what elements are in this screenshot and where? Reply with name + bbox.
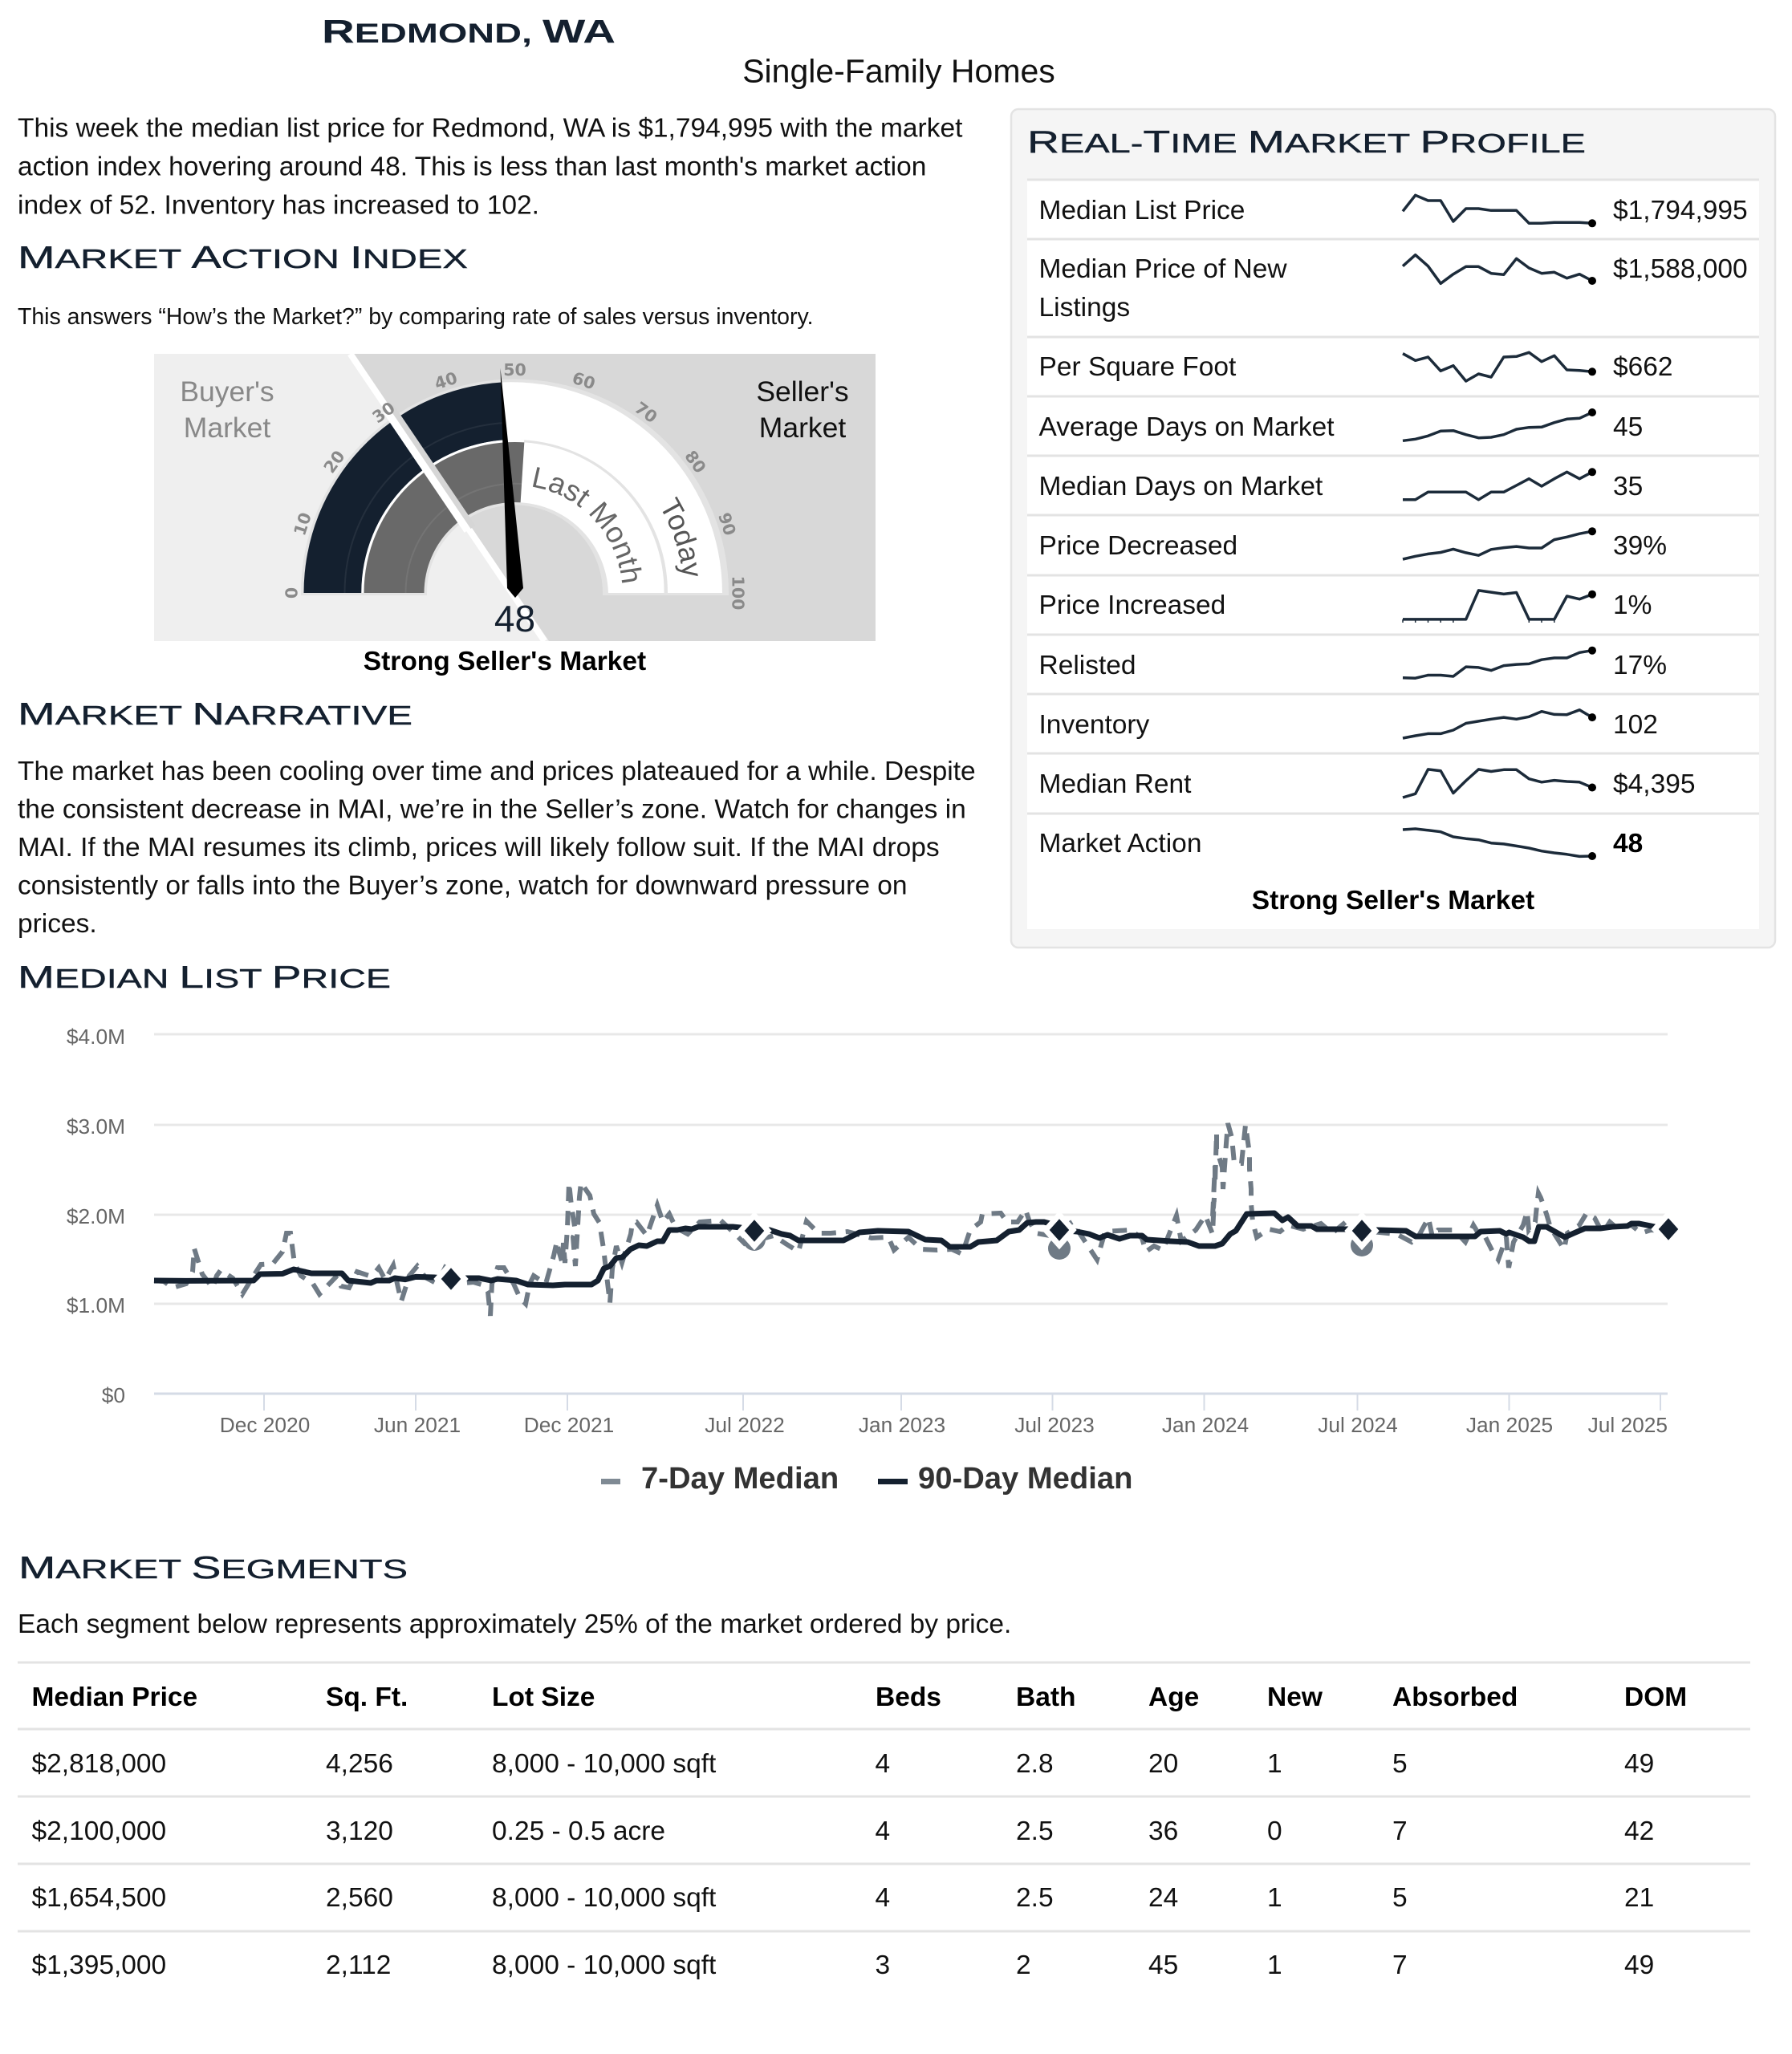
row: median days on market: Median Days on Market [1038,472,1323,501]
y axis labels: $0 [102,1383,125,1407]
last month value arc [364,442,524,593]
row: price decreased [1038,527,1667,561]
y axis labels: $4.0M [67,1025,125,1049]
segment row 1: 20 [1148,1749,1178,1779]
table header [32,1683,1687,1712]
table header: DOM [1624,1683,1687,1712]
row: price increased: 1% [1613,591,1652,620]
segment row 1: 4 [875,1749,890,1779]
segment row 2: 3,120 [326,1817,393,1846]
row: median list price: $1,794,995 [1613,196,1748,225]
y axis labels: $2.0M [67,1204,125,1228]
segment row 4: 2,112 [326,1950,391,1980]
row: inventory: Inventory [1038,710,1150,740]
segment row 4: 7 [1392,1950,1408,1980]
x axis labels: Dec 2020 [220,1413,310,1437]
row: median price of new listings: Median Price of New [1038,254,1287,284]
segment row 1: 2.8 [1016,1749,1054,1779]
gauge background: buyer zone [154,354,876,641]
row: median rent: Median Rent [1038,769,1192,799]
y axis labels: $3.0M [67,1114,125,1139]
segment row 1: 4,256 [326,1749,393,1779]
row: average days on market: 45 [1613,412,1643,442]
segment row 3: 1 [1267,1883,1282,1913]
gauge scale labels: 100 [729,576,748,610]
row: median list price: Median List Price [1038,196,1245,225]
row: average days on market [1038,408,1643,442]
last month band empty part [521,442,664,593]
gauge divider stripe [388,409,469,530]
segment row 3: 21 [1624,1883,1654,1913]
x axis labels: Jan 2023 [859,1413,945,1437]
heading: market segments: M ARKET S EGMENTS [18,1551,408,1585]
x axis labels: Jun 2021 [374,1413,461,1437]
row: relisted: 17% [1613,651,1667,680]
segment row 1 [32,1749,1654,1779]
table header: New [1267,1683,1323,1712]
x axis labels: Jul 2023 [1014,1413,1095,1437]
line chart: median list price [67,1025,1682,1496]
segment row 3: $1,654,500 [32,1883,166,1913]
gauge scale labels: 10 [290,510,315,538]
intro text block: index of 52. Inventory has increased to 102. [18,191,539,220]
7-day median series [154,1123,1668,1316]
gauge caption: Strong Seller's Market [364,647,646,676]
today value arc [303,382,506,593]
gauge scale labels: 40 [432,368,460,393]
row: relisted [1038,647,1667,680]
row: inventory: 102 [1613,710,1658,740]
market narrative text block: prices. [18,909,97,939]
segment row 1: 1 [1267,1749,1282,1779]
segment row 2: 2.5 [1016,1817,1054,1846]
label: today: Today [663,496,698,576]
gauge scale labels [282,360,748,610]
row: median rent [1038,769,1695,799]
table header: Sq. Ft. [326,1683,408,1712]
segment row 4: 49 [1624,1950,1654,1980]
row: market action: 48 [1613,829,1643,859]
intro text block: action index hovering around 48. This is less than last month's market action [18,152,926,181]
table header: Beds [876,1683,941,1712]
profile summary: Strong Seller's Market [1252,886,1534,915]
row: average days on market: Average Days on Market [1038,412,1335,442]
row: price decreased: 39% [1613,531,1667,561]
gauge value: 48 [494,598,535,639]
gauge ring outline [301,379,729,595]
heading: market narrative: M ARKET N ARRATIVE [18,697,412,732]
zone divider [350,354,544,641]
segment row 2: 0 [1267,1817,1282,1846]
gauge scale labels: 90 [714,510,740,538]
segment row 2: 4 [875,1817,890,1846]
table header: Age [1148,1683,1199,1712]
panel: real-time market profile [1011,109,1775,948]
segment row 3: 8,000 - 10,000 sqft [492,1883,717,1913]
gauge scale labels: 50 [503,360,526,380]
x axis labels: Jul 2024 [1318,1413,1398,1437]
title: R EDMOND, WA [322,13,616,50]
table header: Absorbed [1392,1683,1518,1712]
row: price increased: Price Increased [1038,591,1225,620]
segment row 4: 1 [1267,1950,1282,1980]
row: per square foot: $662 [1613,352,1673,382]
x axis labels: Jan 2025 [1466,1413,1553,1437]
x axis labels: Jul 2022 [705,1413,785,1437]
row: median days on market [1038,468,1643,501]
gauge scale labels: 70 [631,398,660,427]
market narrative text block: MAI. If the MAI resumes its climb, prices will likely follow suit. If the MAI drops [18,833,940,863]
heading: median list price: M EDIAN L IST P RICE [18,960,391,995]
gauge scale labels: 30 [369,398,399,427]
seller's market label: Seller's [756,375,849,408]
table header: Lot Size [492,1683,595,1712]
segment row 2: 42 [1624,1817,1654,1846]
market action index description: This answers “How’s the Market?” by comparing rate of sales versus inventory. [18,304,813,330]
7-day markers [743,1220,1679,1260]
heading: market action index: M ARKET A CTION INDEX [18,241,468,275]
segment row 2: 7 [1392,1817,1408,1846]
segment row 4: 2 [1016,1950,1031,1980]
x axis labels [220,1413,1668,1437]
label: last month: Last Month [533,467,642,583]
gauge: market action index [154,354,876,641]
segment row 2: 0.25 - 0.5 acre [492,1817,665,1846]
segment row 2 [32,1817,1654,1846]
row: per square foot [1038,352,1673,382]
market narrative text block: The market has been cooling over time and prices plateaued for a while. Despite [18,757,976,786]
today band empty part [502,382,722,593]
chart legend: 7-Day Median [641,1461,839,1496]
row: median price of new listings: Listings [1038,293,1130,323]
profile table [1027,180,1759,929]
row: relisted: Relisted [1038,651,1136,680]
y axis labels: $1.0M [67,1293,125,1317]
segment row 1: 8,000 - 10,000 sqft [492,1749,717,1779]
segment row 3 [32,1883,1654,1913]
grid lines [154,1034,1668,1304]
row: price decreased: Price Decreased [1038,531,1237,561]
gauge scale labels: 20 [320,447,349,477]
segment row 1: 49 [1624,1749,1654,1779]
row: per square foot: Per Square Foot [1038,352,1237,382]
intro text block: This week the median list price for Redmond, WA is $1,794,995 with the market [18,114,963,143]
row: median rent: $4,395 [1613,769,1695,799]
gauge scale labels: 80 [681,447,709,477]
row: inventory [1038,710,1658,740]
seller's market label: Market [759,412,846,444]
row: market action: Market Action [1038,829,1201,859]
segment row 3: 24 [1148,1883,1178,1913]
segment row 3: 2.5 [1016,1883,1054,1913]
chart legend: 90-Day Median [918,1461,1132,1496]
gauge scale labels: 60 [570,368,598,393]
90-day markers [437,1214,1682,1294]
market narrative text block [18,757,976,939]
segment row 1: 5 [1392,1749,1408,1779]
panel background [1011,109,1775,948]
segment row 4: $1,395,000 [32,1950,166,1980]
x axis labels: Jul 2025 [1588,1413,1668,1437]
segment row 3: 5 [1392,1883,1408,1913]
market segments description: Each segment below represents approximately 25% of the market ordered by price. [18,1610,1011,1639]
intro text block [18,114,963,220]
market narrative text block: the consistent decrease in MAI, we’re in the Seller’s zone. Watch for changes in [18,794,966,825]
chart legend [601,1461,1132,1496]
row: market action [1038,829,1643,860]
y axis labels [67,1025,125,1407]
row: price increased [1038,591,1652,623]
table: market segments [18,1662,1750,1980]
row: median price of new listings [1038,254,1748,323]
table header: Median Price [32,1683,197,1712]
row: median price of new listings: $1,588,000 [1613,254,1748,284]
needle [501,368,523,598]
90-day median series [154,1213,1668,1285]
segment row 4 [32,1950,1654,1980]
segment row 4: 45 [1148,1950,1178,1980]
market narrative text block: consistently or falls into the Buyer’s zone, watch for downward pressure on [18,871,908,900]
subtitle: Single-Family Homes [742,53,1055,90]
row: median list price [1038,195,1748,227]
buyer's market label: Market [184,412,270,444]
segment row 1: $2,818,000 [32,1749,166,1779]
segment row 2: 36 [1148,1817,1178,1846]
panel heading: R EAL- T IME M ARKET P ROFILE [1027,125,1586,160]
x axis labels: Jan 2024 [1162,1413,1249,1437]
buyer's market label: Buyer's [180,375,274,408]
segment row 2: $2,100,000 [32,1817,166,1846]
segment row 3: 4 [875,1883,890,1913]
segment row 3: 2,560 [326,1883,393,1913]
segment row 4: 3 [875,1950,890,1980]
x axis [154,1394,1668,1411]
row: median days on market: 35 [1613,472,1643,501]
table header: Bath [1016,1683,1075,1712]
segment row 4: 8,000 - 10,000 sqft [492,1950,717,1980]
x axis labels: Dec 2021 [524,1413,614,1437]
gauge background: seller zone [353,354,876,641]
gauge scale labels: 0 [282,587,302,599]
